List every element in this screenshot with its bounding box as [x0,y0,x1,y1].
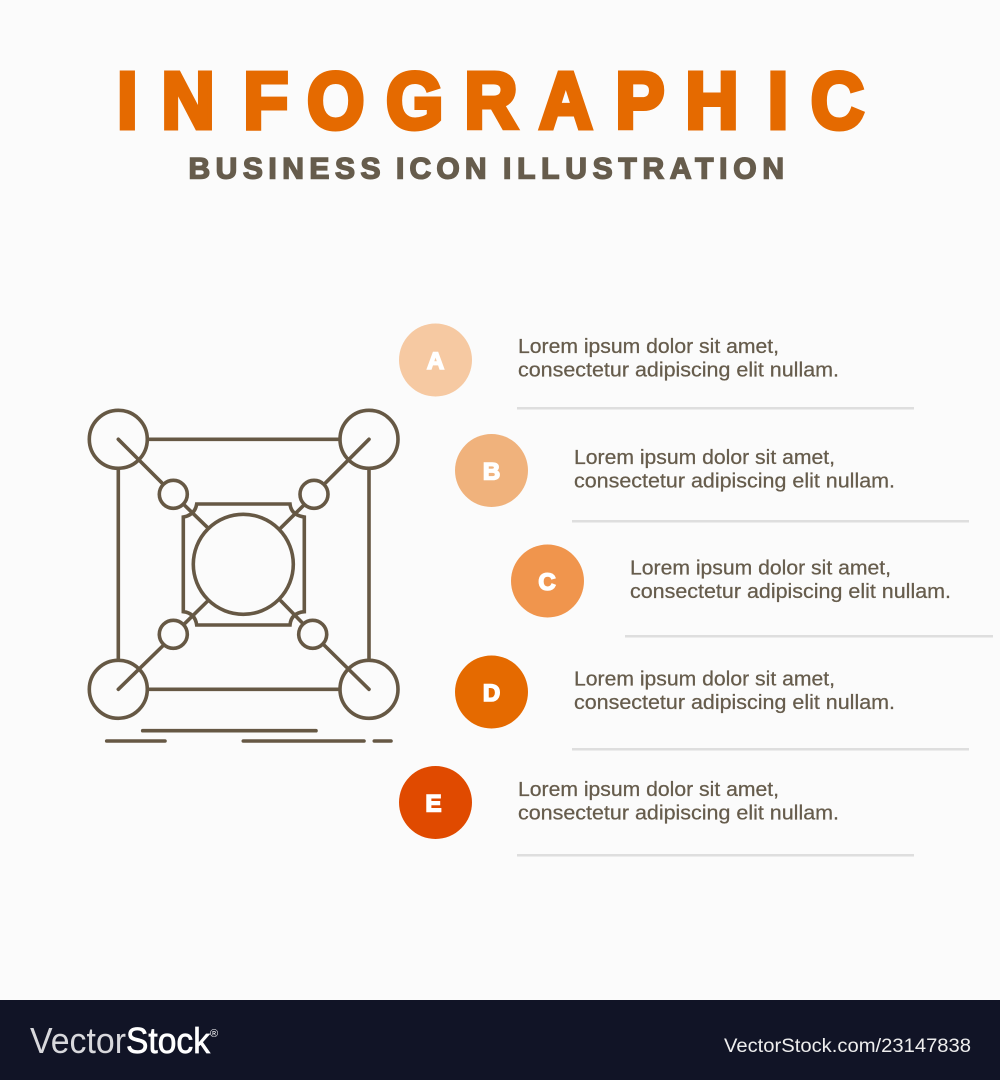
subtitle: ILLUSTRATION [503,152,784,185]
step C [511,544,993,638]
badge D [455,656,528,728]
text A: consectetur adipiscing elit nullam. [518,360,839,382]
badge A: A [427,348,444,375]
text E: consectetur adipiscing elit nullam. [518,802,839,824]
badge D: D [483,680,500,707]
footer image id: VectorStock.com/23147838 [724,1036,971,1057]
subtitle: BUSINESS [188,152,380,185]
step B [455,434,969,522]
footer logo: ® [210,1028,218,1040]
footer bar [0,1000,1000,1080]
badge B: B [483,458,500,486]
footer logo [30,1020,218,1061]
text E [518,779,839,824]
text C [630,558,951,603]
badge C: C [538,569,556,596]
subtitle [188,152,784,185]
icon: network base [89,410,398,741]
step A [399,324,914,410]
badge A [399,324,472,396]
title: INFOGRAPHIC [117,56,864,146]
text D [574,668,895,714]
badge E [399,766,472,839]
badge C [511,544,584,618]
subtitle: ICON [396,152,486,185]
text E: Lorem ipsum dolor sit amet, [518,779,779,801]
text C: consectetur adipiscing elit nullam. [630,581,951,603]
text A [518,336,839,382]
text D: Lorem ipsum dolor sit amet, [574,668,835,690]
text B [574,447,895,492]
text A: Lorem ipsum dolor sit amet, [518,336,779,358]
step E [399,766,914,856]
footer logo: Stock [126,1020,211,1061]
footer logo: Vector [30,1020,126,1061]
text B: Lorem ipsum dolor sit amet, [574,447,835,469]
text D: consectetur adipiscing elit nullam. [574,692,895,714]
step D [455,656,969,750]
text C: Lorem ipsum dolor sit amet, [630,558,891,580]
badge B [455,434,528,507]
badge E: E [425,790,442,818]
text B: consectetur adipiscing elit nullam. [574,470,895,492]
